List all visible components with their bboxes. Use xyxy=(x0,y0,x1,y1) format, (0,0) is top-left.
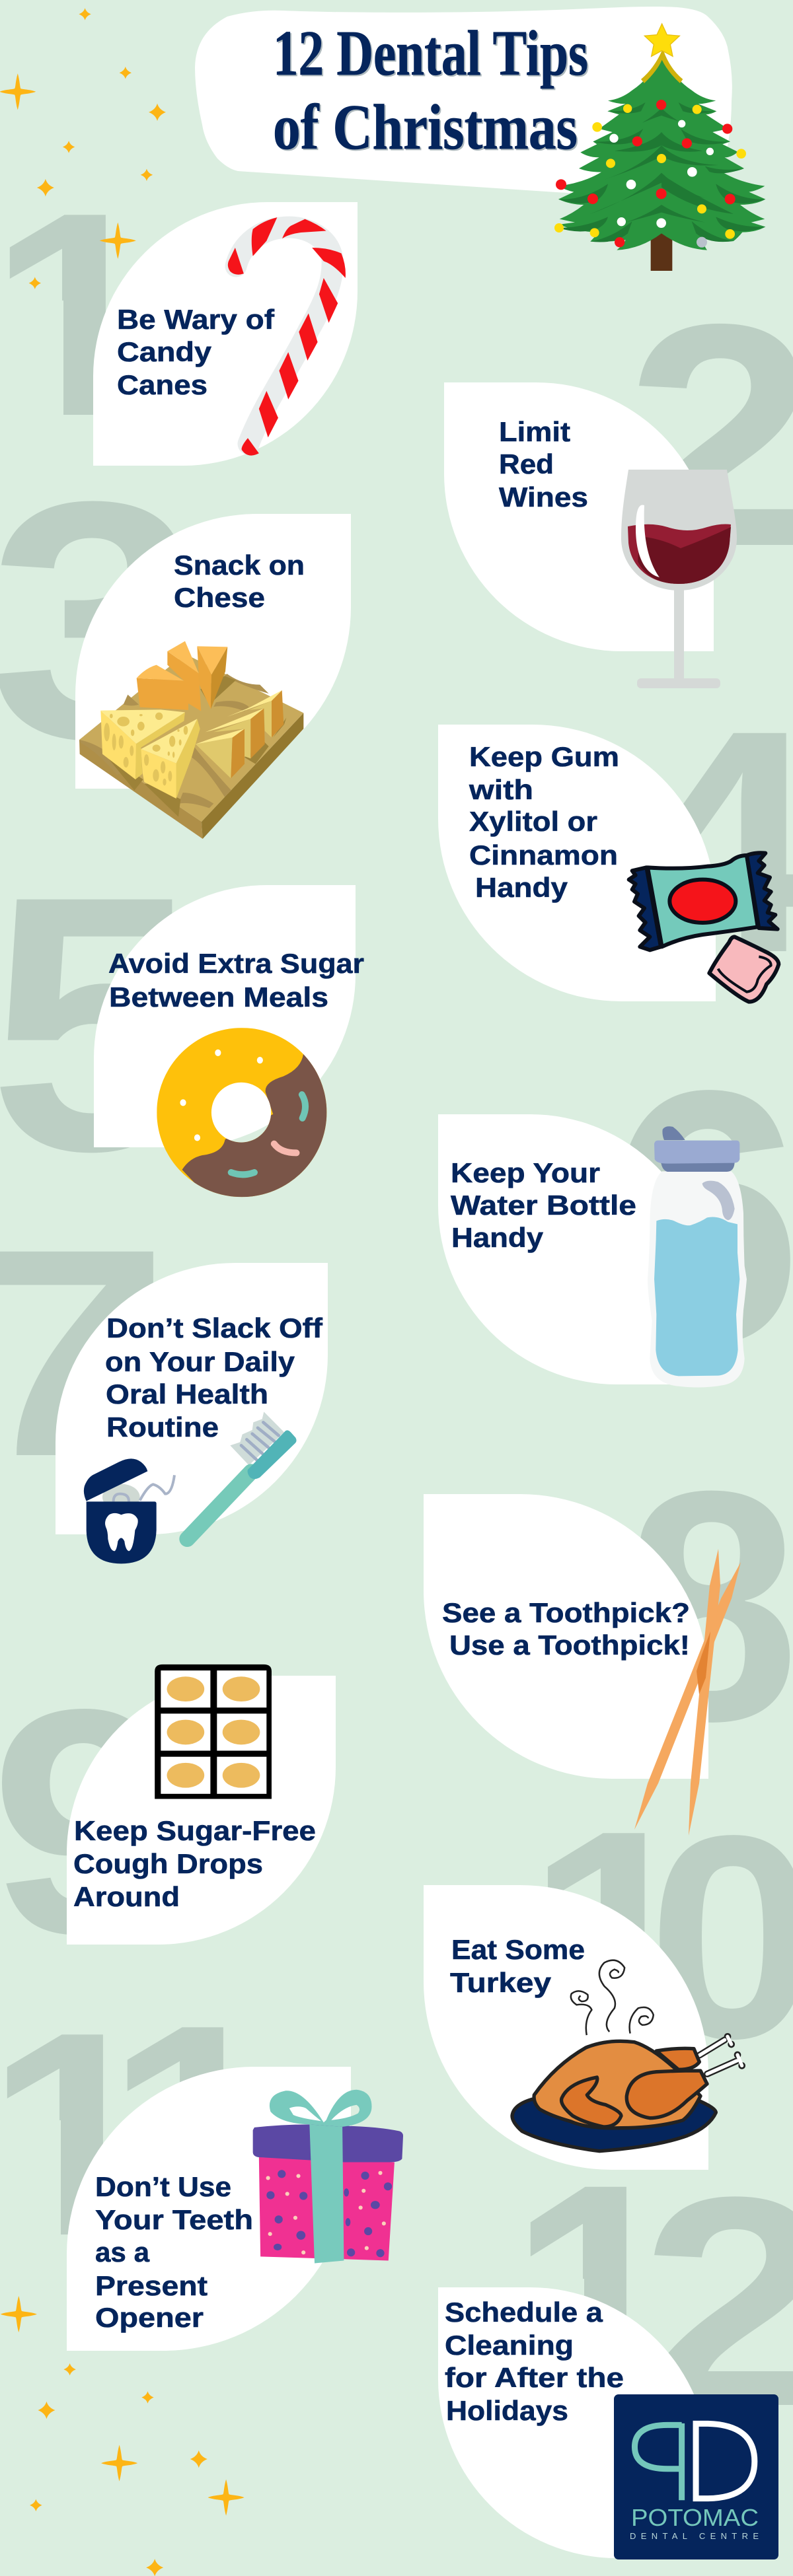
tip text xyxy=(469,741,619,903)
tip text: Candy xyxy=(117,336,212,367)
leaf shape xyxy=(93,202,358,466)
icon: floss box xyxy=(84,1458,174,1563)
tip text: Wines xyxy=(499,482,588,513)
tip text xyxy=(450,1934,585,1998)
icon: gum xyxy=(629,853,778,1002)
tip text: Holidays xyxy=(446,2395,568,2426)
leaf shape xyxy=(75,514,351,789)
tip text xyxy=(174,550,305,613)
tip text xyxy=(73,1815,316,1912)
leaf shape xyxy=(94,885,356,1147)
tip text: Keep Gum xyxy=(469,741,619,772)
tip text: Keep Your xyxy=(451,1157,600,1188)
leaf shape xyxy=(444,382,714,651)
panel: tip 10 turkey xyxy=(424,1885,745,2170)
icon: cough drop blister pack xyxy=(155,1664,272,1799)
title text: of Christmas xyxy=(273,92,578,162)
leaf shape xyxy=(438,2287,709,2558)
foliage xyxy=(558,53,765,250)
number 10: 1 xyxy=(526,1768,704,2104)
tip text: Eat Some xyxy=(451,1934,585,1965)
panel: tip 5 sugar xyxy=(94,885,364,1201)
panel: tip 8 toothpick xyxy=(424,1494,741,1836)
tip text: Cough Drops xyxy=(73,1848,263,1879)
tip text xyxy=(117,304,275,400)
icon: cheese board xyxy=(79,641,303,839)
icon: gift box xyxy=(253,2090,403,2264)
panel: tip 1 candy canes xyxy=(93,202,358,466)
icon: roast turkey xyxy=(512,2033,745,2151)
panel: tip 6 water bottle xyxy=(438,1114,747,1387)
foliage shading xyxy=(558,102,765,242)
logo: Potomac Dental Centre: DENTAL CENTRE xyxy=(630,2531,759,2541)
tip text: Canes xyxy=(117,369,208,400)
tip text: as a xyxy=(95,2236,150,2268)
panel: tip 2 red wines xyxy=(444,382,737,688)
leaf shape xyxy=(424,1885,708,2170)
tip text: Around xyxy=(73,1881,180,1912)
leaf shape xyxy=(424,1494,708,1779)
icon: candy cane xyxy=(228,217,346,456)
tip text: Don’t Slack Off xyxy=(106,1312,323,1343)
title blob xyxy=(195,7,732,198)
star xyxy=(644,24,679,56)
tip text: Handy xyxy=(475,872,568,903)
tip text xyxy=(445,2297,624,2426)
icon: toothpicks xyxy=(634,1549,741,1836)
number 11 xyxy=(7,2027,223,2235)
tip text: Red xyxy=(499,448,554,480)
icon: toothbrush xyxy=(187,1412,297,1539)
icon: wine glass xyxy=(621,470,737,688)
icon: donut xyxy=(157,1028,326,1197)
leaf shape xyxy=(56,1263,328,1534)
icon: christmas tree xyxy=(554,24,765,271)
tip text xyxy=(105,1312,323,1443)
tip text: Turkey xyxy=(450,1967,552,1998)
sparkles: top left xyxy=(0,8,166,289)
number 12 xyxy=(509,2118,793,2472)
tip text: Xylitol or xyxy=(469,806,597,837)
tip text: Handy xyxy=(451,1222,544,1253)
tip text: on Your Daily xyxy=(105,1346,295,1377)
tip text xyxy=(451,1157,636,1253)
tip text: with xyxy=(469,774,533,805)
tip text: Cleaning xyxy=(445,2330,574,2361)
title banner xyxy=(195,7,732,198)
icon: steam xyxy=(571,1960,654,2035)
panel: tip 9 cough drops xyxy=(67,1664,336,1945)
tip text: Present xyxy=(95,2270,208,2301)
sparkles: bottom left xyxy=(1,2296,245,2576)
leaf shape xyxy=(438,1114,709,1384)
tip text: Oral Health xyxy=(106,1378,268,1410)
tip text xyxy=(95,2171,253,2333)
tip text xyxy=(499,416,588,513)
tip text: for After the xyxy=(445,2362,624,2393)
tip text: Be Wary of xyxy=(117,304,275,335)
tip text: Avoid Extra Sugar xyxy=(108,948,364,979)
title text xyxy=(273,18,588,162)
tip text: Keep Sugar-Free xyxy=(74,1815,316,1846)
panel: tip 4 gum xyxy=(438,725,778,1002)
leaf shape xyxy=(67,1676,336,1945)
panel: tip 7 daily oral health xyxy=(56,1263,328,1563)
ribbon xyxy=(641,51,683,83)
logo: Potomac Dental Centre: POTOMAC xyxy=(631,2504,759,2531)
tip text: Opener xyxy=(95,2302,204,2333)
tip text xyxy=(442,1597,690,1661)
panel: tip 3 cheese xyxy=(75,514,351,839)
tip text: Routine xyxy=(106,1412,219,1443)
number 11: 1 xyxy=(106,1964,282,2289)
ornaments xyxy=(556,100,736,247)
tip text: Don’t Use xyxy=(95,2171,231,2202)
title text: 12 Dental Tips xyxy=(273,18,588,89)
number 12: 1 xyxy=(509,2118,685,2472)
tip text: See a Toothpick? xyxy=(442,1597,690,1628)
leaf shape xyxy=(67,2067,351,2351)
logo: Potomac Dental Centre xyxy=(614,2394,778,2559)
panel: tip 12 schedule a cleaning xyxy=(438,2287,778,2559)
tip text xyxy=(108,948,364,1013)
tip text: Between Meals xyxy=(109,982,328,1013)
number 10 xyxy=(526,1768,793,2104)
tip text: Cinnamon xyxy=(469,840,618,871)
tip text: Limit xyxy=(499,416,570,447)
tip text: Snack on xyxy=(174,550,305,581)
tip text: Use a Toothpick! xyxy=(449,1629,690,1661)
tip text: Chese xyxy=(174,582,265,613)
trunk xyxy=(651,231,672,271)
tip text: Water Bottle xyxy=(451,1190,636,1221)
icon: water bottle xyxy=(648,1126,747,1387)
panel: tip 11 present opener xyxy=(67,2067,403,2351)
tip text: Schedule a xyxy=(445,2297,603,2328)
tip text: Your Teeth xyxy=(95,2204,253,2235)
leaf shape xyxy=(438,725,716,1001)
